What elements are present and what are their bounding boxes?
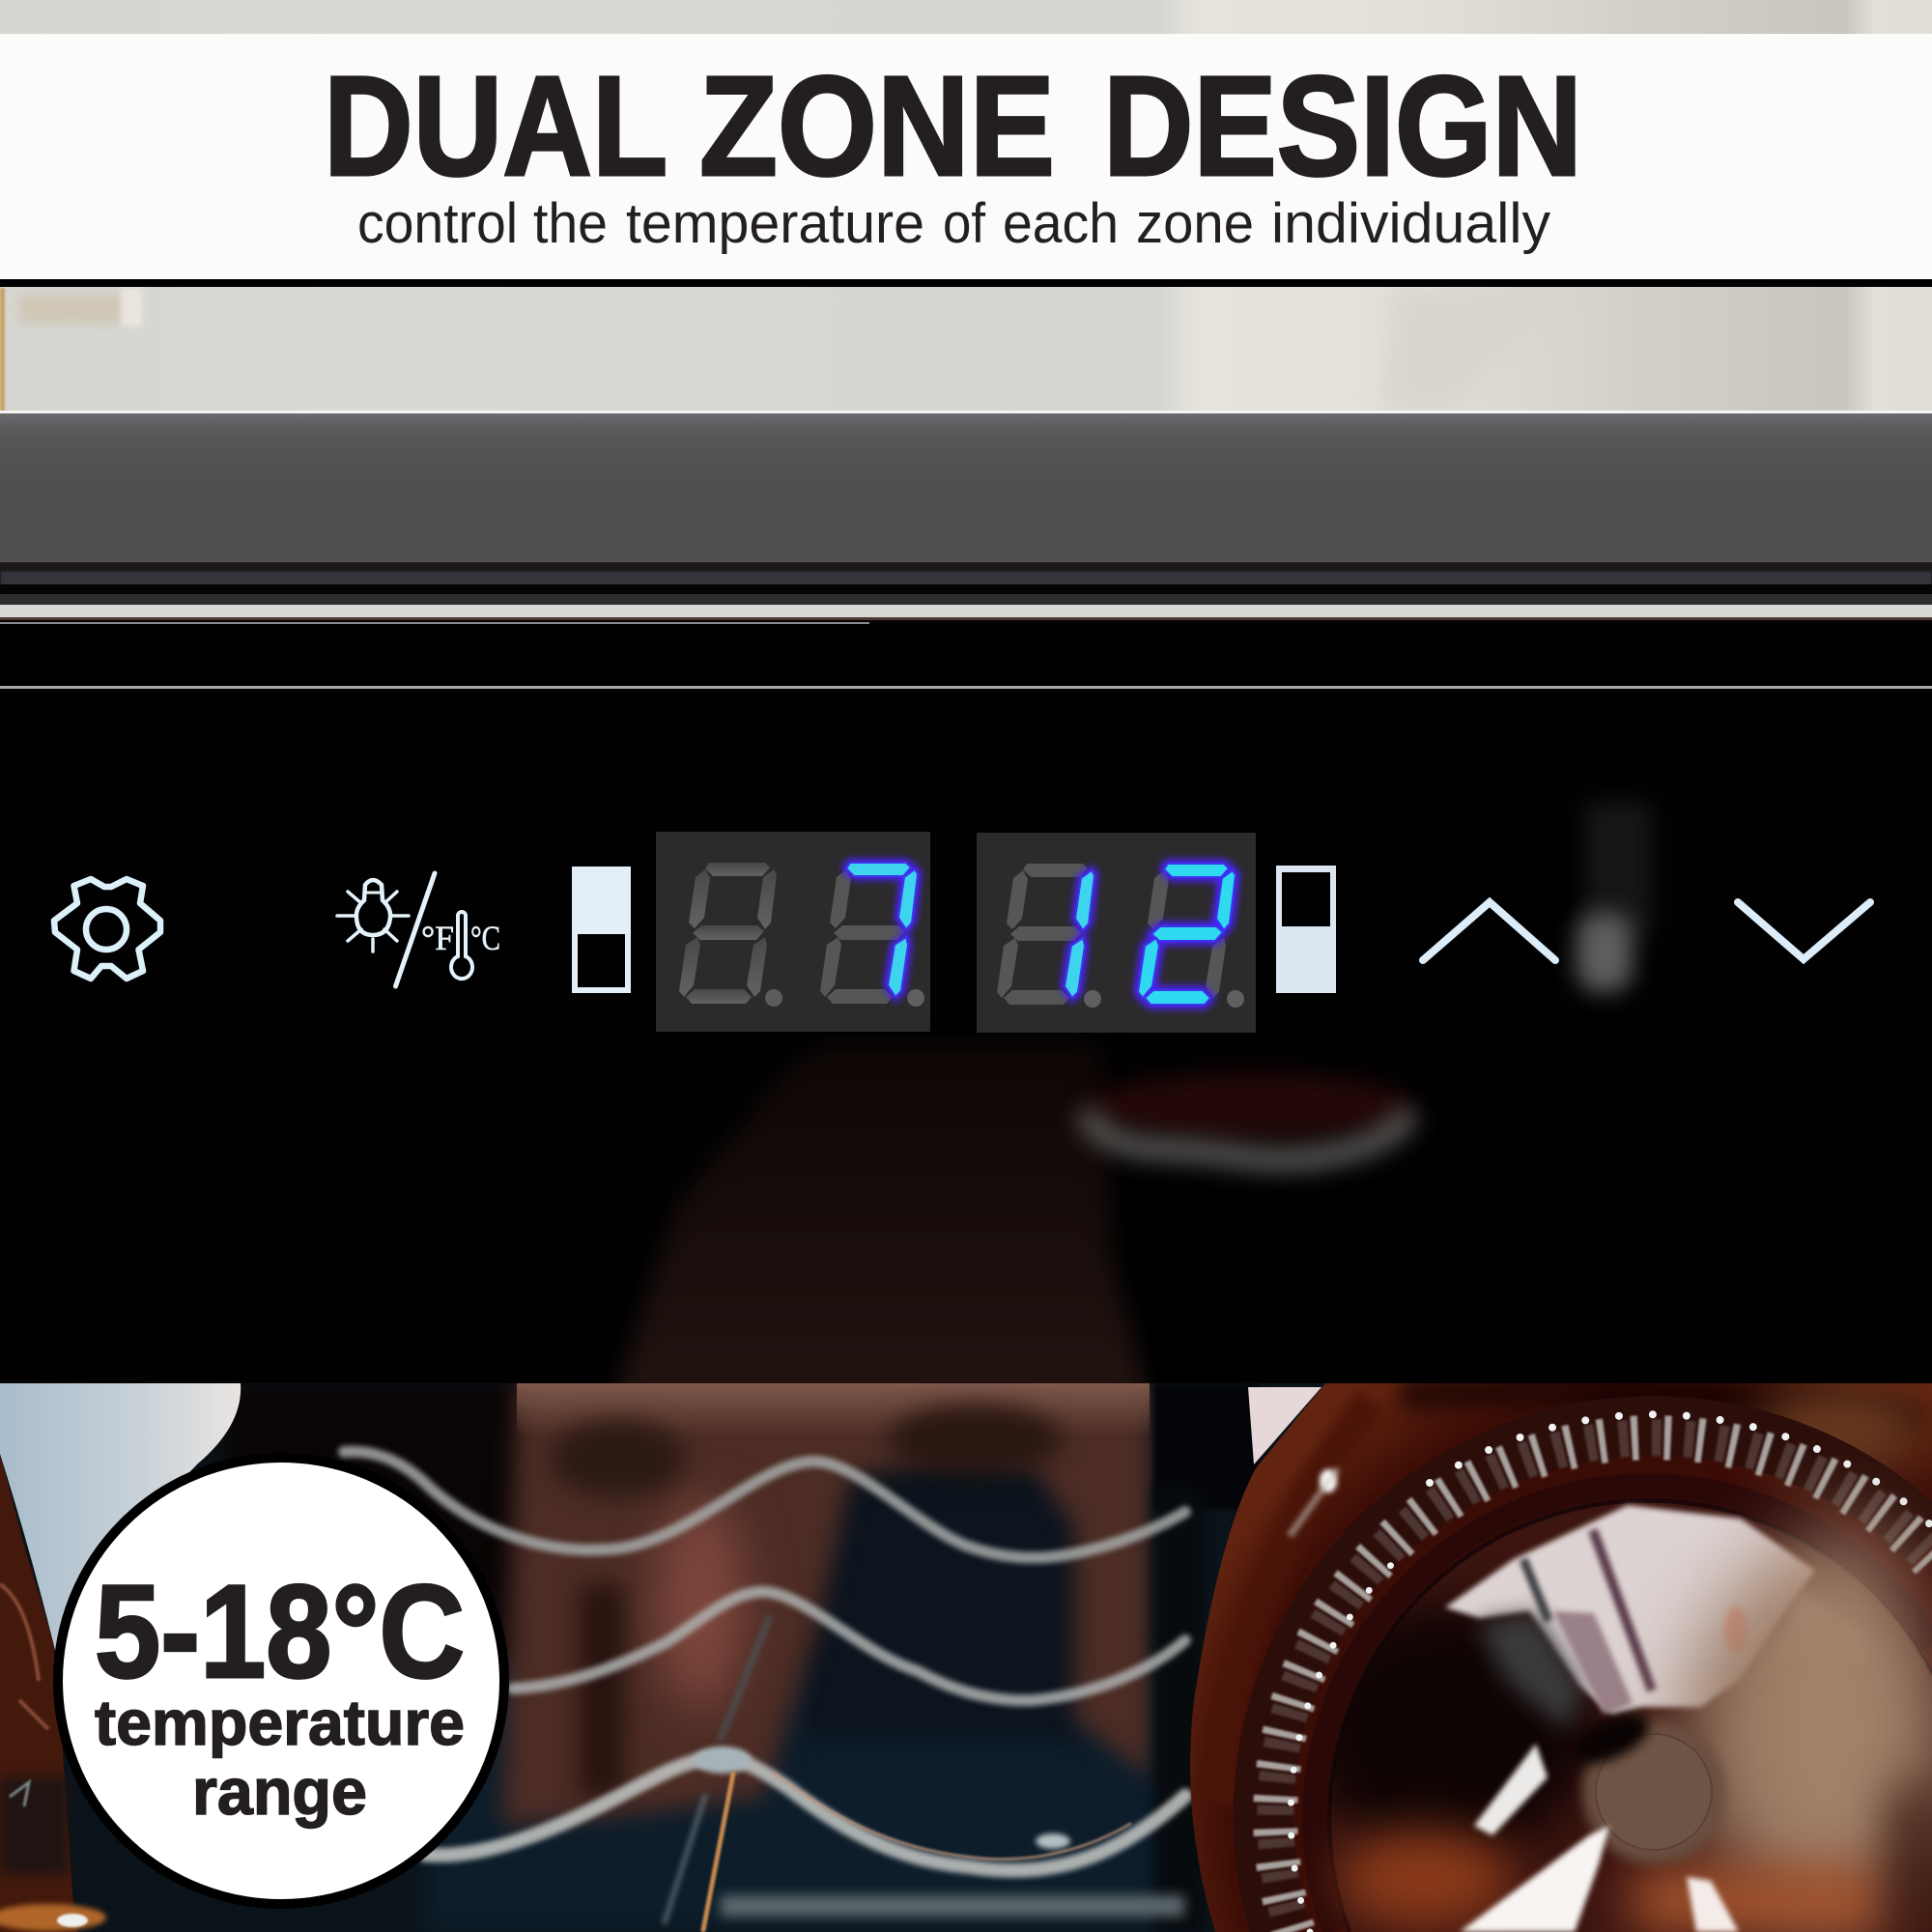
digit 2 (1138, 864, 1244, 1008)
reflection: hand (502, 1383, 1151, 1826)
badge: temperature range (58, 1458, 504, 1904)
heading: DUAL ZONE DESIGN: ZONE (699, 47, 1055, 206)
icon: lower zone selected (1276, 866, 1336, 993)
bottle rim shading (1401, 1392, 1922, 1420)
white streak highlights (1474, 1744, 1548, 1835)
brown beige glow (1686, 1575, 1927, 1903)
title banner (0, 34, 1932, 287)
bottle base disc (1331, 1503, 1766, 1932)
dark reflection (1304, 1604, 1594, 1855)
digit 1 (997, 864, 1101, 1008)
icon: upper zone selected (572, 867, 631, 993)
subtitle: control (357, 192, 518, 255)
subtitle: zone (1136, 192, 1254, 255)
subtitle: the (533, 192, 608, 255)
light fan reflection (1445, 1505, 1815, 1715)
subtitle: individually (1271, 192, 1550, 255)
background: blurred kitchen wall (0, 0, 1932, 415)
icon: light and temperature unit: °F (421, 919, 454, 957)
badge label line 1: temperature (95, 1687, 465, 1758)
reflection: blurred glass (1087, 1073, 1415, 1159)
black vertical bar (1153, 1383, 1260, 1932)
icon: down arrow (1738, 902, 1870, 959)
subtitle: each (1003, 192, 1119, 255)
control panel: black glass (0, 620, 1932, 1401)
bottle at left edge (0, 1454, 106, 1932)
reflection: finger on glass (1577, 802, 1652, 992)
appliance top trim (0, 411, 1932, 620)
heading: DUAL ZONE DESIGN: DESIGN (1103, 47, 1582, 206)
icon: up arrow (1423, 902, 1555, 960)
dark interior (222, 1383, 1179, 1932)
punt (1582, 1720, 1725, 1863)
subtitle: temperature (626, 192, 924, 255)
dim digit (679, 863, 782, 1007)
photo: wine rack and bottle seen through the glass (0, 1383, 1932, 1932)
badge label line 2: range (192, 1755, 367, 1829)
display: left zone temperature 7 (656, 832, 930, 1032)
inner bottle base ring (1314, 1486, 1932, 1932)
subtitle: of (943, 192, 986, 255)
icon: light and temperature unit (337, 873, 500, 986)
reflection: brown figure (613, 1043, 1150, 1401)
display: right zone temperature 12 (977, 833, 1256, 1033)
badge value: 5-18°C (95, 1558, 465, 1706)
wine bottle (1190, 1383, 1932, 1932)
digit 7 (820, 863, 924, 1007)
bright glass corner (1248, 1387, 1321, 1464)
dimple ring (1264, 1414, 1932, 1932)
icon: light and temperature unit: °C (470, 919, 500, 957)
icon: settings gear (54, 879, 160, 979)
heading: DUAL ZONE DESIGN: DUAL (324, 47, 666, 206)
pale shape at left (0, 1383, 241, 1671)
rack wires (344, 1452, 1185, 1930)
